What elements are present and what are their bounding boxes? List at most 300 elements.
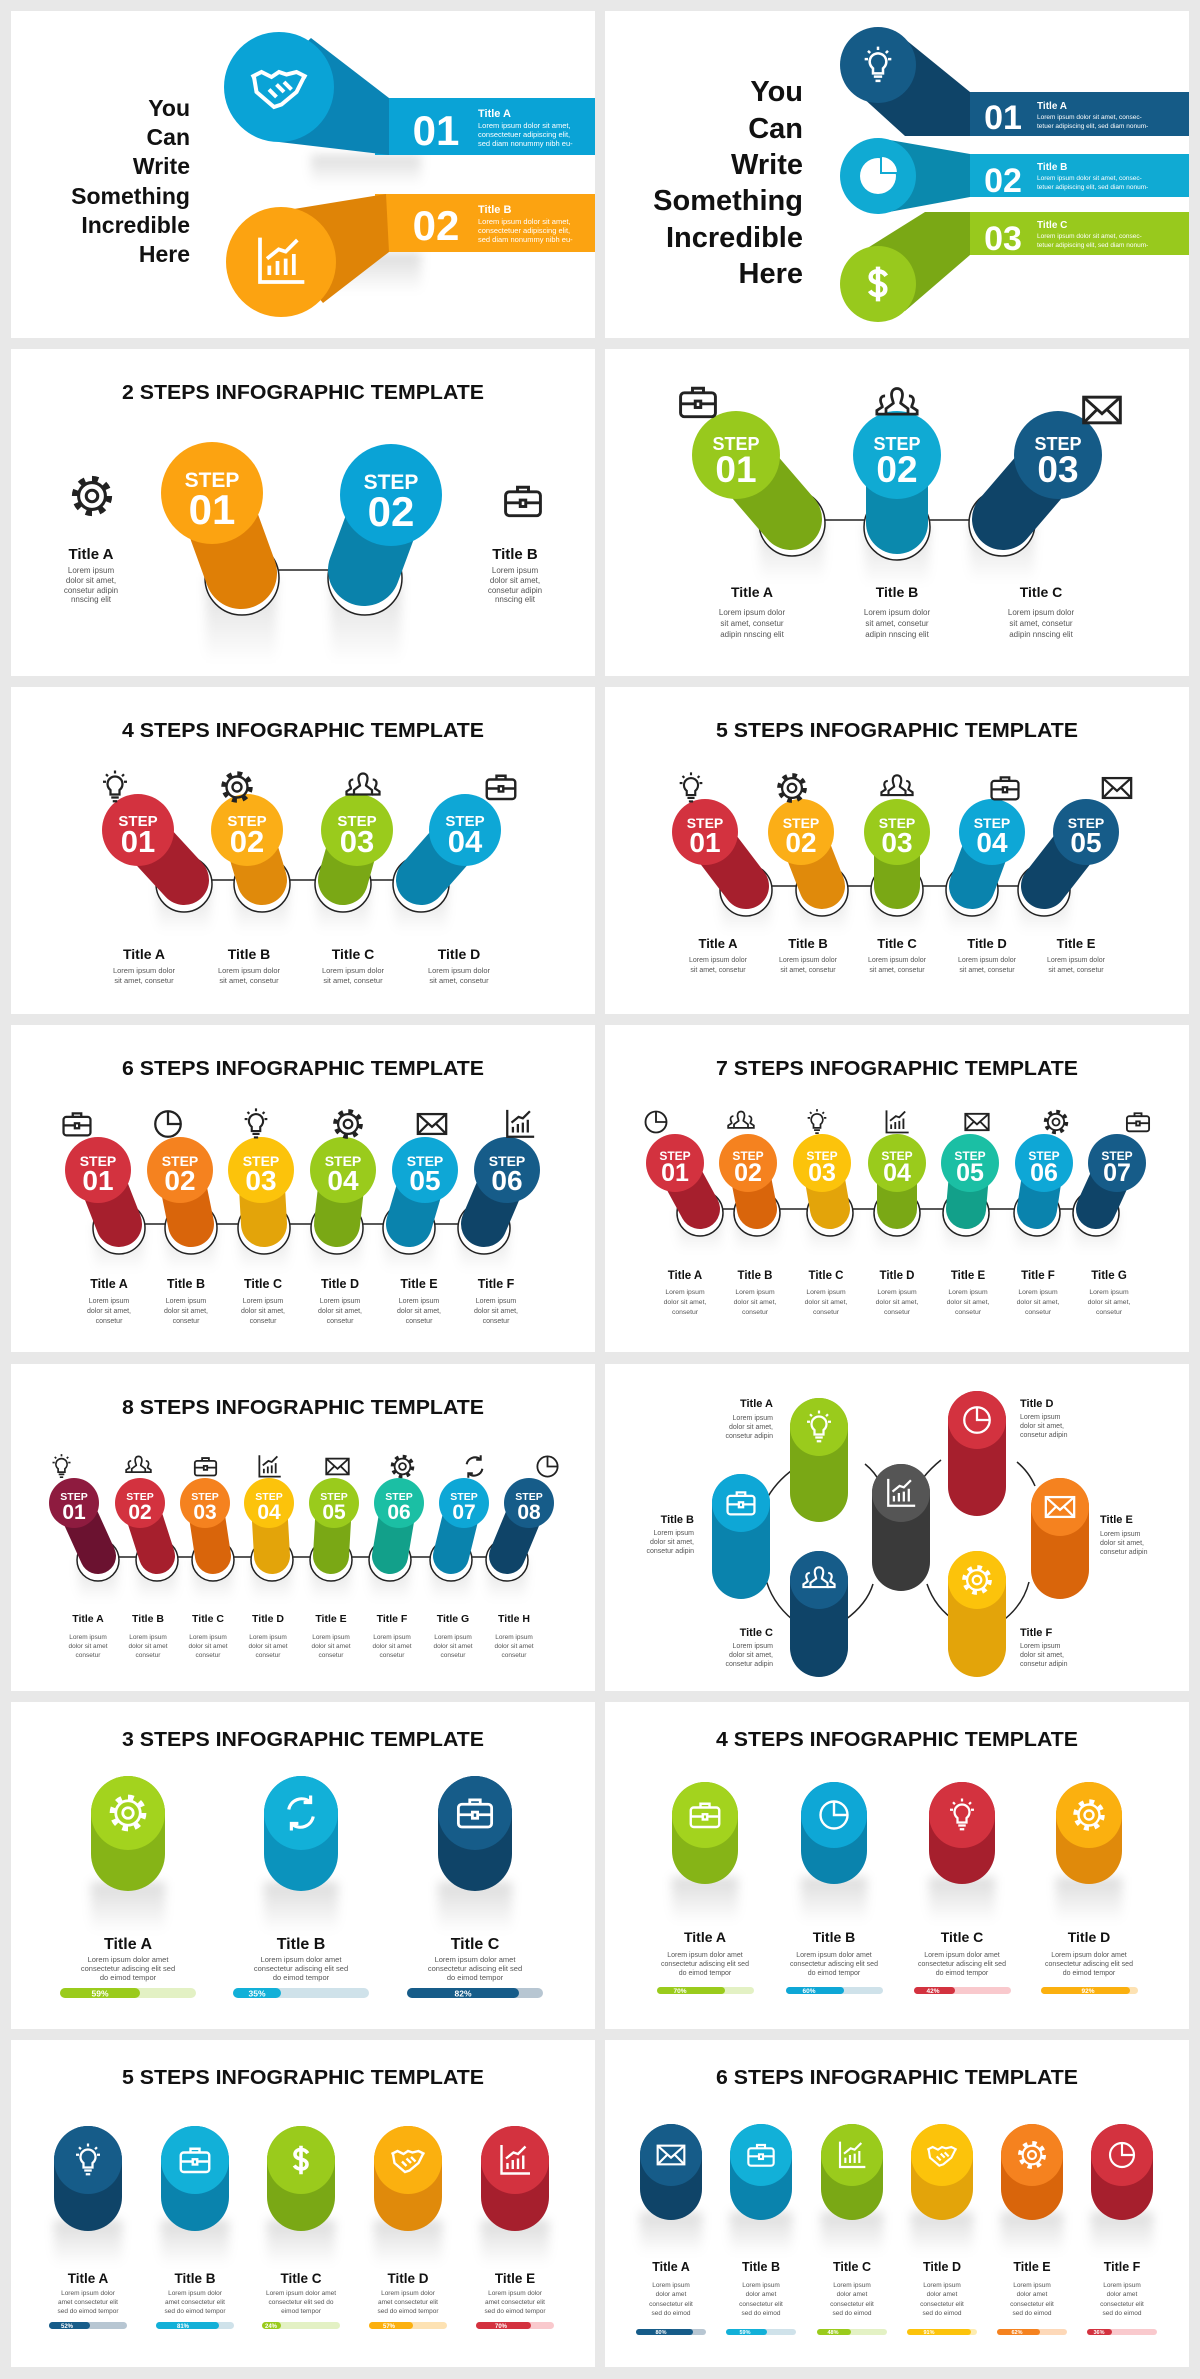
texts and bars: Title D (387, 2271, 429, 2286)
titles: Lorem ipsum dolor (864, 608, 930, 617)
titles: Title B (132, 1613, 164, 1625)
texts and bars: 91% (923, 2330, 935, 2336)
texts and bars: Lorem ipsum (833, 2282, 871, 2289)
step 06: STEP (1028, 1149, 1060, 1163)
titles: dolor sit amet, (87, 1308, 131, 1315)
title: 8 STEPS INFOGRAPHIC TEMPLATE (122, 1397, 484, 1419)
text: title A: consetur adipin (64, 586, 118, 595)
title: 5 STEPS INFOGRAPHIC TEMPLATE (716, 720, 1078, 742)
step 03 (864, 799, 930, 932)
titles: Title D (321, 1277, 359, 1291)
text C with bar (407, 1936, 543, 1998)
heading: you can write something incredible here (71, 95, 190, 267)
cylinder A (54, 2126, 122, 2265)
texts and bars: Lorem ipsum (1013, 2282, 1051, 2289)
heading: you can write something incredible here: Here (139, 241, 190, 267)
titles: consetur (76, 1652, 101, 1659)
texts and bars: dolor amet (656, 2291, 687, 2298)
titles: dolor sit amet, (318, 1308, 362, 1315)
step 01: 01 (661, 1159, 689, 1187)
band 02: Lorem ipsum dolor sit amet, consec- (1037, 175, 1142, 182)
label F: dolor sit amet, (1020, 1652, 1064, 1659)
step 08 (486, 1478, 554, 1600)
heading: you can write something incredible here: Can (147, 124, 190, 150)
titles (719, 584, 1074, 639)
band 01: 01 (984, 99, 1022, 137)
texts and bars: Title B (813, 1929, 855, 1945)
text C with bar: Title C (451, 1936, 500, 1953)
step 04: 04 (976, 827, 1008, 858)
titles: Lorem ipsum (189, 1634, 227, 1641)
texts and bars: consectetur elit (1100, 2301, 1144, 2308)
band 02 (840, 138, 1189, 214)
panel: 6 steps bars (605, 2040, 1189, 2367)
band 03: Title C (1037, 220, 1067, 231)
titles: Lorem ipsum dolor (779, 957, 838, 964)
titles: sit amet, consetur (780, 967, 836, 974)
titles: Lorem ipsum (1018, 1289, 1058, 1296)
step 02: 02 (734, 1159, 762, 1187)
text: title B: Title B (492, 546, 538, 563)
titles: sit amet, consetur (429, 976, 489, 985)
step 03: STEP (879, 815, 915, 831)
texts and bars: Title A (652, 2260, 690, 2274)
texts and bars: do eimod tempor (1063, 1970, 1116, 1977)
connector line (746, 885, 1044, 887)
titles: Lorem ipsum (249, 1634, 287, 1641)
titles: Title C (244, 1277, 282, 1291)
titles: consetur (955, 1309, 982, 1316)
text B with bar: do eimod tempor (273, 1973, 330, 1982)
title: 2 STEPS INFOGRAPHIC TEMPLATE (122, 382, 484, 404)
titles: consetur (884, 1309, 911, 1316)
titles: dolor sit amet, (241, 1308, 285, 1315)
titles: consetur (1025, 1309, 1052, 1316)
step 02: 02 (876, 449, 918, 490)
titles: Title B (876, 584, 918, 600)
title: 4 STEPS INFOGRAPHIC TEMPLATE (122, 720, 484, 742)
titles: Title B (738, 1270, 772, 1282)
step 05: STEP (407, 1153, 443, 1169)
titles: dolor sit amet (494, 1643, 534, 1650)
titles: Lorem ipsum dolor (428, 966, 491, 975)
band 02: Title B (1037, 162, 1067, 173)
step 02: 02 (368, 488, 414, 535)
label A: consetur adipin (726, 1433, 773, 1440)
step 06: STEP (489, 1153, 525, 1169)
text: title A: Lorem ipsum (68, 566, 114, 575)
panel: 8 steps (11, 1364, 595, 1691)
band 02: tetuer adipiscing elit, sed diam nonum- (1037, 184, 1148, 191)
texts and bars: eimod tempor (281, 2308, 322, 2315)
titles: dolor sit amet, (664, 1299, 706, 1306)
step 03: STEP (337, 813, 377, 830)
texts and bars: 24% (265, 2324, 278, 2330)
texts and bars: consectetur elit (920, 2301, 964, 2308)
titles: Lorem ipsum dolor (113, 966, 176, 975)
titles: Title B (788, 936, 828, 951)
titles: sit amet, consetur (323, 976, 383, 985)
titles: sit amet, consetur (720, 619, 784, 628)
step 05 (309, 1478, 359, 1600)
step 08: 08 (517, 1501, 541, 1524)
texts and bars: 70% (673, 1988, 687, 1995)
step 03 (315, 794, 393, 932)
label D (1020, 1398, 1068, 1439)
step 05: 05 (1070, 827, 1102, 858)
text C with bar: consectetur adiscing elit sed (428, 1964, 522, 1973)
texts and bars: consectetur adiscing elit sed (790, 1961, 878, 1968)
step 05: 05 (409, 1165, 441, 1196)
text A with bar (60, 1936, 196, 1998)
panel: 3 steps bars (11, 1702, 595, 2029)
band 01: 01 (413, 107, 459, 154)
panel: 3 steps (605, 349, 1189, 676)
icon: people (877, 388, 917, 414)
titles: consetur (441, 1652, 466, 1659)
cylinder B (264, 1776, 338, 1932)
step 05: 05 (322, 1501, 346, 1524)
titles: dolor sit amet, (947, 1299, 989, 1306)
step 03 (180, 1478, 234, 1600)
titles: Lorem ipsum dolor (689, 957, 748, 964)
cylinder E (1001, 2124, 1063, 2254)
step 01: STEP (80, 1153, 116, 1169)
step 06 (369, 1478, 424, 1600)
heading: you can write something incredible here: Something (71, 183, 190, 209)
step 04: STEP (255, 1491, 283, 1503)
titles: adipin nnscing elit (865, 630, 930, 639)
band 01: Lorem ipsum dolor sit amet, consec- (1037, 114, 1142, 121)
texts and bars: sed do eimod (741, 2310, 781, 2317)
text: title A: dolor sit amet, (66, 576, 116, 585)
step 01: 01 (715, 449, 757, 490)
band 02 (226, 194, 595, 317)
icon: briefcase (506, 487, 540, 516)
titles: consetur (196, 1652, 221, 1659)
connector line (792, 519, 1002, 521)
label B (647, 1514, 694, 1555)
connector line (271, 569, 336, 571)
texts and bars: dolor amet (837, 2291, 868, 2298)
band 03 (840, 212, 1189, 322)
step 02: STEP (364, 471, 418, 494)
step 08: STEP (515, 1491, 543, 1503)
icon: gear (75, 479, 109, 513)
step 01 (646, 1134, 723, 1251)
label E: consetur adipin (1100, 1549, 1148, 1556)
step 02: STEP (873, 434, 921, 454)
texts and bars: consectetur elit (739, 2301, 783, 2308)
texts and bars: consectetur elit (1010, 2301, 1054, 2308)
icons (103, 770, 515, 801)
label C: Lorem ipsum (733, 1643, 773, 1650)
icon: envelope (1084, 397, 1120, 423)
text: title B (488, 546, 542, 604)
text B with bar (233, 1936, 369, 1998)
titles: Title A (123, 946, 165, 962)
label D: consetur adipin (1020, 1432, 1068, 1439)
step 06: STEP (385, 1491, 413, 1503)
node A (790, 1398, 848, 1522)
step 07: 07 (1103, 1159, 1131, 1187)
title: 5 STEPS INFOGRAPHIC TEMPLATE (122, 2067, 484, 2089)
label F (1020, 1627, 1068, 1668)
texts and bars: amet consectetur elit (485, 2299, 545, 2306)
label C: dolor sit amet, (729, 1652, 773, 1659)
icons (646, 1109, 1149, 1133)
texts and bars: sed do eimod (922, 2310, 962, 2317)
connector line (98, 1556, 507, 1558)
titles: Title B (167, 1277, 205, 1291)
band 01: Title A (478, 108, 511, 120)
texts and bars: 60% (802, 1988, 816, 1995)
texts and bars: dolor amet (927, 2291, 958, 2298)
step 03 (969, 411, 1102, 581)
label A: Title A (740, 1398, 773, 1410)
texts and bars: amet consectetur elit (58, 2299, 118, 2306)
titles: consetur (502, 1652, 527, 1659)
titles: Title H (498, 1613, 530, 1625)
title: 7 STEPS INFOGRAPHIC TEMPLATE (716, 1058, 1078, 1080)
titles (689, 936, 1106, 974)
texts and bars: Title D (1068, 1929, 1110, 1945)
cylinder F (1091, 2124, 1153, 2254)
step 06: 06 (491, 1165, 523, 1196)
titles: Lorem ipsum (735, 1289, 775, 1296)
titles: Title E (951, 1270, 985, 1282)
texts and bars: dolor amet (1107, 2291, 1138, 2298)
text: title B: dolor sit amet, (490, 576, 540, 585)
texts and bars: Title A (684, 1929, 726, 1945)
label A (726, 1398, 773, 1440)
titles: dolor sit amet, (734, 1299, 776, 1306)
texts and bars: Lorem ipsum dolor (61, 2290, 116, 2297)
heading: you can write something incredible here: You (750, 76, 803, 108)
texts and bars: consectetur elit (649, 2301, 693, 2308)
titles: sit amet, consetur (114, 976, 174, 985)
text B with bar: consectetur adiscing elit sed (254, 1964, 348, 1973)
step 07 (430, 1478, 489, 1600)
step 04 (393, 794, 501, 932)
text: title A: nnscing elit (71, 595, 112, 604)
titles: Title C (1020, 584, 1062, 600)
step 02 (719, 1134, 780, 1251)
step 01: 01 (62, 1501, 86, 1524)
texts and bars: consectetur adiscing elit sed (661, 1961, 749, 1968)
titles: Title E (1057, 936, 1096, 951)
step 04: STEP (974, 815, 1010, 831)
connector line (119, 1223, 484, 1225)
label F: Lorem ipsum (1020, 1643, 1061, 1650)
cylinder A (672, 1782, 738, 1922)
texts and bars: sed do eimod (832, 2310, 872, 2317)
text: title B: Lorem ipsum (492, 566, 538, 575)
texts and bars: Title E (495, 2271, 535, 2286)
band 01: Title A (1037, 101, 1067, 112)
step 03: STEP (191, 1491, 219, 1503)
connector line (700, 1208, 1096, 1210)
texts and bars: Lorem ipsum dolor amet (924, 1952, 1000, 1959)
cylinder B (161, 2126, 229, 2265)
step 04: STEP (325, 1153, 361, 1169)
label C (726, 1627, 773, 1668)
titles: Lorem ipsum (476, 1298, 516, 1305)
titles: Lorem ipsum (312, 1634, 350, 1641)
titles: Title A (90, 1277, 128, 1291)
titles: Title G (1091, 1270, 1127, 1282)
cylinder D (911, 2124, 973, 2254)
titles: dolor sit amet, (805, 1299, 847, 1306)
step 06: 06 (387, 1501, 411, 1524)
band 02: Lorem ipsum dolor sit amet, (478, 217, 571, 226)
text C with bar: 82% (454, 1988, 472, 1998)
titles: Lorem ipsum (495, 1634, 533, 1641)
titles: Title B (228, 946, 270, 962)
titles: sit amet, consetur (1009, 619, 1073, 628)
text A with bar: Title A (104, 1936, 152, 1953)
label D: Title D (1020, 1398, 1053, 1410)
titles: Title F (478, 1277, 515, 1291)
titles: Title D (967, 936, 1007, 951)
texts and bars (657, 1929, 1138, 1995)
titles: consetur (406, 1318, 433, 1325)
texts and bars: sed do eimod (1102, 2310, 1142, 2317)
titles: Title C (332, 946, 374, 962)
texts and bars: Lorem ipsum (923, 2282, 961, 2289)
titles: consetur (672, 1309, 699, 1316)
panel: 7 steps (605, 1025, 1189, 1352)
titles: dolor sit amet (311, 1643, 351, 1650)
texts and bars: consectetur adiscing elit sed (1045, 1961, 1133, 1968)
cylinder C (821, 2124, 883, 2254)
step 02: 02 (164, 1165, 196, 1196)
texts and bars: 70% (495, 2324, 508, 2330)
titles: Lorem ipsum (1089, 1289, 1129, 1296)
step 07: 07 (452, 1501, 476, 1524)
panel: two bands (11, 11, 595, 338)
step 04: 04 (448, 824, 483, 859)
step 03: 03 (881, 827, 913, 858)
titles: sit amet, consetur (869, 967, 925, 974)
texts and bars: Title C (941, 1929, 983, 1945)
band 01: consectetuer adipiscing elit, (478, 130, 570, 139)
titles: Lorem ipsum dolor (1047, 957, 1106, 964)
titles: Title A (731, 584, 773, 600)
texts and bars: 48% (827, 2330, 839, 2336)
step 02 (853, 411, 941, 585)
band 02: 02 (413, 202, 459, 249)
step 02 (328, 444, 442, 662)
texts and bars: Title C (833, 2260, 871, 2274)
step 01: 01 (689, 827, 721, 858)
titles: Title D (252, 1613, 284, 1625)
label B: Title B (661, 1514, 694, 1526)
titles: Lorem ipsum (320, 1298, 360, 1305)
step 02 (147, 1137, 217, 1270)
titles: Lorem ipsum dolor (218, 966, 281, 975)
icon: briefcase (681, 388, 715, 417)
heading: you can write something incredible here: Incredible (81, 212, 190, 238)
heading: you can write something incredible here: Can (748, 113, 803, 145)
titles: Lorem ipsum dolor (322, 966, 385, 975)
cylinder D (374, 2126, 442, 2265)
titles: Lorem ipsum dolor (1008, 608, 1074, 617)
band 01: Lorem ipsum dolor sit amet, (478, 121, 571, 130)
titles: Title F (1021, 1270, 1055, 1282)
titles: Title A (698, 936, 738, 951)
texts and bars: Title F (1104, 2260, 1141, 2274)
texts and bars: sed do eimod (651, 2310, 691, 2317)
titles: Lorem ipsum (948, 1289, 988, 1296)
step 04: STEP (881, 1149, 913, 1163)
step 03: 03 (245, 1165, 277, 1196)
step 04 (868, 1134, 926, 1251)
heading: you can write something incredible here: Incredible (666, 222, 803, 254)
texts and bars: Lorem ipsum dolor (381, 2290, 436, 2297)
label B: dolor sit amet, (650, 1539, 694, 1546)
texts and bars: consectetur elit sed do (268, 2299, 334, 2306)
band 01: tetuer adipiscing elit, sed diam nonum- (1037, 123, 1148, 130)
cylinder D (1056, 1782, 1122, 1922)
titles: adipin nnscing elit (1009, 630, 1074, 639)
step 02: STEP (227, 813, 267, 830)
step 01: STEP (659, 1149, 691, 1163)
heading: you can write something incredible here: Something (653, 185, 803, 217)
step 07 (1073, 1134, 1146, 1251)
titles: Title C (877, 936, 917, 951)
step 01: STEP (687, 815, 723, 831)
step 01: STEP (712, 434, 760, 454)
label E (1100, 1514, 1148, 1556)
titles: Lorem ipsum (373, 1634, 411, 1641)
titles: Lorem ipsum (877, 1289, 917, 1296)
node center (872, 1464, 930, 1591)
step 01: STEP (185, 469, 239, 492)
step 02: STEP (732, 1149, 764, 1163)
titles: Lorem ipsum (89, 1298, 129, 1305)
texts and bars: consectetur elit (830, 2301, 874, 2308)
label F: Title F (1020, 1627, 1052, 1639)
titles: consetur (173, 1318, 200, 1325)
step 06: 06 (1030, 1159, 1058, 1187)
titles: sit amet, consetur (1048, 967, 1104, 974)
step 01 (161, 442, 279, 662)
titles: dolor sit amet (248, 1643, 288, 1650)
step 01: STEP (60, 1491, 88, 1503)
titles: dolor sit amet (188, 1643, 228, 1650)
step 01: 01 (82, 1165, 114, 1196)
cylinder C (929, 1782, 995, 1922)
band 01: sed diam nonummy nibh eu- (478, 139, 573, 148)
texts and bars: consectetur adiscing elit sed (918, 1961, 1006, 1968)
cylinder A (640, 2124, 702, 2254)
step 03: 03 (1037, 449, 1079, 490)
heading: you can write something incredible here: Write (133, 153, 190, 179)
panel: 4 steps (11, 687, 595, 1014)
step 03: STEP (243, 1153, 279, 1169)
band 02: 02 (984, 162, 1022, 200)
band 03: 03 (984, 220, 1022, 258)
heading: you can write something incredible here (653, 76, 803, 290)
text A with bar: 59% (91, 1988, 109, 1998)
titles: Title E (400, 1277, 438, 1291)
panel: 5 steps bars (11, 2040, 595, 2367)
texts and bars: Lorem ipsum (652, 2282, 690, 2289)
titles: Title E (315, 1613, 347, 1625)
texts and bars: dolor amet (1017, 2291, 1048, 2298)
step 05 (383, 1137, 458, 1270)
